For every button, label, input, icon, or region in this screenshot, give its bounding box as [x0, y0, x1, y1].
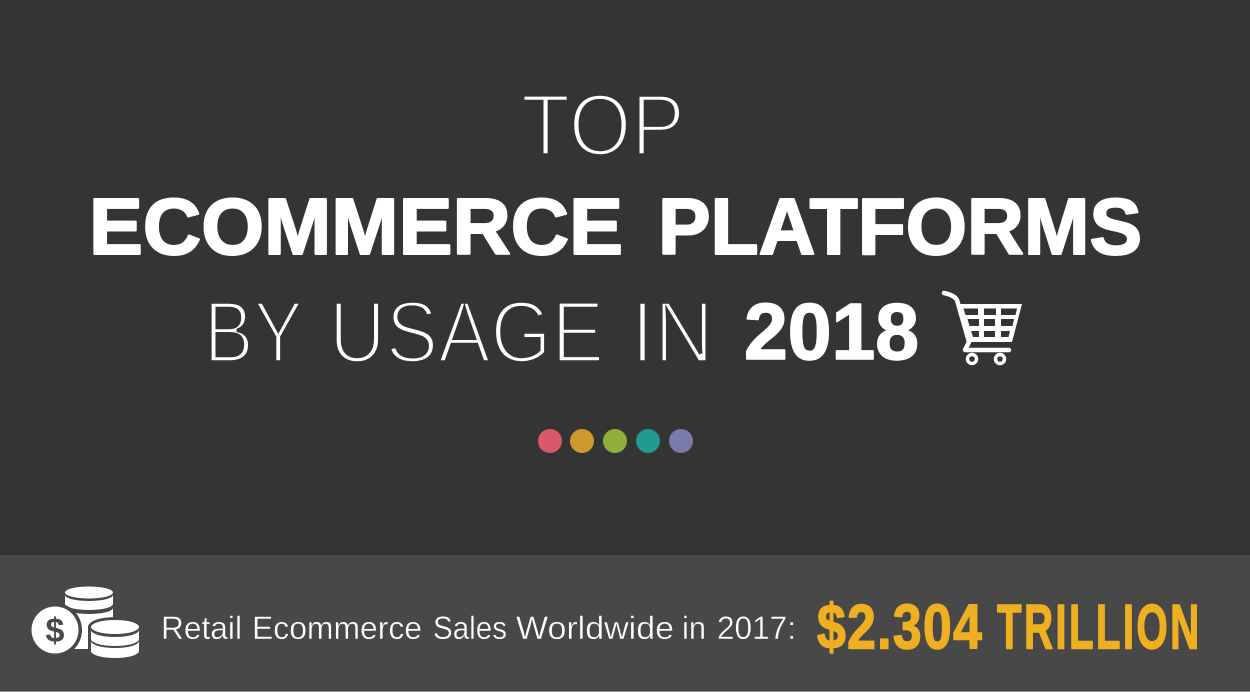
dollar coin: $ [46, 612, 65, 650]
title line: by usage in: IN [631, 284, 714, 381]
title line: by usage in: BY [204, 284, 303, 381]
sales value: $2.304 [817, 593, 982, 663]
title [89, 77, 1142, 381]
sales label: Ecommerce [252, 610, 422, 646]
colored dots [538, 429, 693, 453]
title line: 2018: 2018 [744, 287, 919, 376]
title line: ecommerce platforms: PLATFORMS [658, 182, 1142, 271]
sales label: Worldwide [516, 610, 674, 646]
sales label: in [682, 610, 706, 646]
back coin stack [65, 586, 113, 649]
icon: shopping cart [944, 293, 1022, 364]
title line: ecommerce platforms: ECOMMERCE [89, 182, 623, 271]
sales label: Retail [161, 610, 242, 646]
sales value: TRILLION [997, 593, 1199, 663]
sales value [817, 593, 1199, 663]
sales label: 2017: [717, 610, 796, 646]
sales label: Sales [433, 610, 507, 646]
sales label [161, 610, 796, 646]
title line: ecommerce platforms [89, 182, 1142, 271]
icon: coins with dollar [28, 586, 142, 662]
bottom band [0, 555, 1250, 692]
title line: by usage in [204, 284, 714, 381]
title line: top: TOP [521, 77, 685, 174]
title line: by usage in: USAGE [329, 284, 604, 381]
front coin stack [88, 617, 142, 662]
